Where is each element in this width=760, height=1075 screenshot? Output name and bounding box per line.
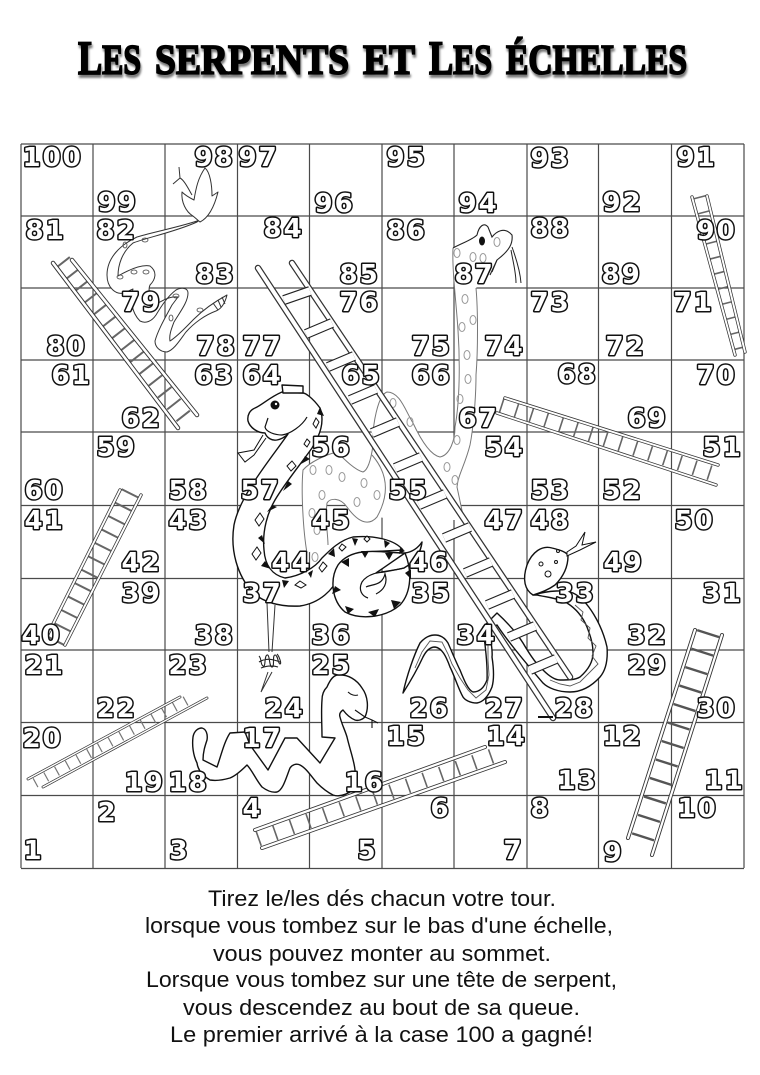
board numbers: 43: [168, 506, 209, 536]
board numbers: 67: [458, 404, 499, 434]
board numbers: 77: [242, 332, 283, 362]
board numbers: 86: [386, 216, 427, 246]
board numbers: 42: [122, 548, 162, 578]
rules text: vous descendez au bout de sa queue.: [183, 995, 580, 1020]
rules text: Tirez le/les dés chacun votre tour.: [208, 886, 556, 911]
board numbers: 91: [676, 143, 717, 173]
board numbers: 44: [272, 548, 312, 578]
board numbers: 72: [606, 332, 646, 362]
spots: [117, 238, 203, 321]
tail tassel: [259, 603, 281, 692]
board numbers: 37: [242, 579, 283, 609]
ladder: right, 67 to 52: [497, 398, 718, 485]
head: [182, 168, 218, 222]
board numbers: 80: [46, 332, 87, 362]
board numbers: 48: [530, 506, 571, 536]
board numbers: 62: [122, 404, 162, 434]
title: [78, 32, 687, 85]
board numbers: 5: [358, 836, 378, 866]
board numbers: 33: [556, 579, 596, 609]
rules text: [145, 886, 617, 1047]
board numbers: 78: [196, 332, 237, 362]
board numbers: 54: [484, 433, 525, 463]
ladder: top left, 80 to 62: [53, 260, 197, 428]
coil and tail: [333, 542, 422, 617]
board numbers: 19: [124, 768, 165, 798]
board numbers: 61: [52, 361, 92, 391]
board numbers: 25: [312, 651, 352, 681]
board numbers: 55: [388, 476, 429, 506]
board numbers: 73: [530, 288, 571, 318]
rules text: Lorsque vous tombez sur une tête de serpent,: [146, 967, 617, 992]
board numbers: 94: [458, 189, 499, 219]
board numbers: 96: [314, 189, 355, 219]
board numbers: 29: [628, 651, 668, 681]
board numbers: 88: [530, 214, 571, 244]
board numbers: 69: [628, 404, 668, 434]
black triangles: [258, 407, 411, 617]
title: ÉCHELLES: [506, 37, 687, 84]
board numbers: 13: [558, 766, 598, 796]
board numbers: 6: [430, 794, 451, 824]
board numbers: 84: [264, 214, 304, 244]
board numbers: 34: [456, 621, 497, 651]
board numbers: 20: [22, 724, 63, 754]
head details: [238, 385, 307, 462]
title: SERPENTS: [155, 38, 349, 84]
icon: eye and tongue: [479, 236, 521, 283]
board numbers: 100: [22, 143, 83, 173]
board numbers: 28: [554, 694, 595, 724]
board numbers: 75: [412, 332, 452, 362]
board numbers: 81: [26, 216, 66, 246]
board numbers: 17: [242, 724, 283, 754]
ladder: large central ladder: [258, 263, 570, 718]
board numbers: 99: [98, 188, 138, 218]
board numbers: 30: [696, 694, 737, 724]
board numbers: 47: [484, 506, 525, 536]
board numbers: 27: [484, 694, 525, 724]
snake: long spotted snake from 87 to 45: [302, 225, 521, 562]
board numbers: 76: [340, 288, 380, 318]
board numbers: 58: [168, 476, 209, 506]
board numbers: 39: [122, 579, 162, 609]
board numbers: 35: [412, 579, 452, 609]
board numbers: 66: [412, 361, 452, 391]
board numbers: 90: [696, 216, 737, 246]
board numbers: 26: [410, 694, 450, 724]
ladder: bottom, 5 to 14: [255, 747, 505, 848]
board numbers: 97: [238, 143, 279, 173]
rules text: Le premier arrivé à la case 100 a gagné!: [170, 1022, 593, 1047]
zigzag pattern: [415, 605, 598, 698]
board numbers: 1: [24, 836, 44, 866]
ladder: lower left, 22 to 20: [28, 697, 207, 787]
game board grid: [21, 144, 744, 868]
ladder: top right, 90 to 71: [692, 196, 745, 355]
board numbers: 89: [602, 260, 642, 290]
board numbers: 41: [24, 506, 65, 536]
board numbers: 65: [342, 361, 382, 391]
board numbers: 38: [194, 621, 235, 651]
diamonds: [252, 418, 370, 588]
board numbers: 83: [196, 260, 236, 290]
board numbers: 2: [98, 798, 118, 828]
board numbers: 53: [530, 476, 571, 506]
board numbers: 24: [264, 694, 305, 724]
board numbers: 56: [312, 433, 352, 463]
board numbers: 85: [340, 260, 380, 290]
board numbers: 68: [558, 360, 598, 390]
board numbers: 11: [704, 766, 745, 796]
board numbers: 93: [530, 144, 571, 174]
board numbers: 45: [312, 506, 352, 536]
board numbers: 36: [312, 621, 352, 651]
board numbers: 14: [486, 722, 527, 752]
spots: [539, 550, 560, 577]
board numbers: 46: [410, 548, 450, 578]
board numbers: 92: [602, 188, 643, 218]
board numbers: 10: [678, 794, 718, 824]
board numbers: 22: [96, 694, 137, 724]
face and tongue: [348, 692, 378, 728]
board numbers: 57: [240, 476, 281, 506]
board numbers: 60: [24, 476, 65, 506]
board numbers: 18: [168, 768, 209, 798]
ladder: left, 42 to 40: [45, 490, 141, 645]
board numbers: 12: [602, 722, 643, 752]
board numbers: [22, 143, 745, 868]
tail rattle: [213, 297, 225, 310]
board numbers: 52: [602, 476, 643, 506]
board numbers: 51: [702, 433, 743, 463]
tongue: [567, 532, 596, 556]
board numbers: 79: [122, 288, 162, 318]
board numbers: 98: [194, 143, 235, 173]
board numbers: 74: [484, 332, 525, 362]
board numbers: 95: [386, 143, 427, 173]
board numbers: 23: [168, 651, 209, 681]
board numbers: 71: [674, 288, 714, 318]
board numbers: 64: [242, 361, 283, 391]
board numbers: 9: [604, 838, 624, 868]
board numbers: 32: [628, 621, 668, 651]
board numbers: 50: [674, 506, 715, 536]
rules text: lorsque vous tombez sur le bas d'une échelle,: [145, 913, 613, 938]
board numbers: 87: [454, 260, 495, 290]
head: [525, 547, 568, 595]
board numbers: 7: [504, 836, 524, 866]
board numbers: 16: [344, 768, 385, 798]
board numbers: 59: [96, 433, 137, 463]
snake: 98 to 78: [107, 167, 227, 352]
title: LES: [78, 32, 141, 85]
board numbers: 8: [530, 794, 551, 824]
board numbers: 21: [24, 651, 65, 681]
title: LES: [429, 32, 492, 85]
board numbers: 40: [22, 621, 62, 651]
title: ET: [363, 38, 415, 84]
board numbers: 82: [96, 216, 137, 246]
board numbers: 70: [696, 361, 737, 391]
ladder: right, 30 to 9: [628, 630, 722, 855]
tongue: [173, 167, 192, 195]
board numbers: 4: [242, 794, 263, 824]
board numbers: 31: [702, 579, 743, 609]
rules text: vous pouvez monter au sommet.: [213, 941, 551, 966]
snake: bottom snake from 25 to 18: [193, 675, 378, 796]
snake: coiled snake from 48 to 26: [403, 532, 607, 703]
spots: [309, 238, 500, 562]
board numbers: 49: [604, 548, 644, 578]
board numbers: 63: [194, 361, 235, 391]
board numbers: 15: [386, 722, 427, 752]
snake: large diamond-patterned snake from 64 to 37: [233, 385, 422, 692]
board numbers: 3: [170, 836, 190, 866]
